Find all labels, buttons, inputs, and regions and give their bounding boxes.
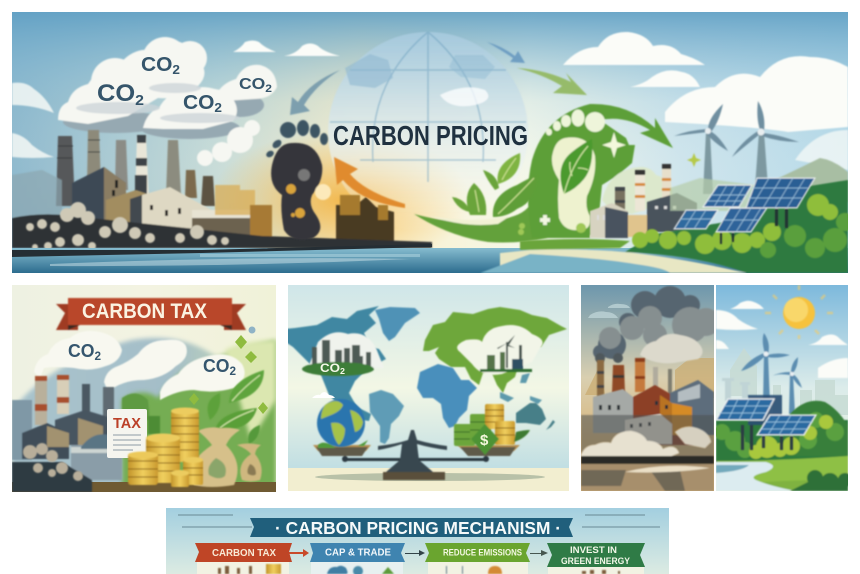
CO2 labels in clouds: 2 <box>214 100 222 115</box>
mechanism background <box>166 508 669 574</box>
earth globe on scale <box>317 399 368 448</box>
title: carbon pricing: CARBON PRICING <box>333 120 528 151</box>
CO2 label on city: CO <box>320 361 338 375</box>
solar panels <box>716 395 816 450</box>
water strip <box>12 244 848 273</box>
carbon tax red banner <box>56 298 246 330</box>
CO2 labels in clouds: CO <box>141 54 171 76</box>
background clouds <box>12 32 848 170</box>
tax document: TAX <box>113 415 141 432</box>
trees and grass <box>714 401 852 491</box>
clean sky <box>716 285 848 491</box>
chimneys <box>56 130 215 206</box>
dollar sign: $ <box>480 432 489 449</box>
step: carbon tax: CARBON TAX <box>212 548 276 559</box>
green sweep and clean footprint <box>414 104 701 242</box>
CO2 label on city: 2 <box>340 367 346 376</box>
CO2 labels in clouds <box>98 57 272 112</box>
balance scale <box>313 430 520 480</box>
step: reduce emissions <box>425 543 530 562</box>
CO2 labels: CO <box>203 356 230 376</box>
polluted ground and water <box>581 415 714 491</box>
polluted factories <box>593 380 714 445</box>
low ground smoke <box>26 202 229 250</box>
clean chimneys <box>722 378 750 402</box>
carbon footprint icon, dark <box>265 120 331 240</box>
polluted chimneys <box>597 358 672 399</box>
CO2 labels in clouds: CO <box>97 80 133 107</box>
CO2 labels in clouds: CO <box>239 76 263 93</box>
money bags <box>191 427 262 487</box>
polluted sky <box>581 285 715 491</box>
decorative diamonds <box>189 326 268 414</box>
panel: polluted versus clean comparison <box>581 285 852 491</box>
city with CO2 emissions <box>302 332 384 376</box>
step: cap and trade: CAP & TRADE <box>325 548 391 558</box>
left clouds of CO2 smoke <box>58 37 277 166</box>
arrow: tax to cap and trade <box>289 549 309 557</box>
mechanism step icons, cropped <box>218 564 620 574</box>
CO2 labels <box>68 341 236 378</box>
leaves <box>452 153 537 217</box>
polluted city side <box>581 285 720 491</box>
panel: hero carbon pricing scene <box>12 12 854 273</box>
tax document <box>107 409 147 458</box>
step: invest in green energy <box>547 543 645 567</box>
step: cap and trade <box>310 543 405 562</box>
panel: carbon tax <box>12 285 276 492</box>
CO2 labels in clouds: 2 <box>265 83 272 95</box>
coin stacks and dollar diamond <box>454 404 530 455</box>
panel: carbon pricing mechanism <box>166 508 669 574</box>
step: carbon tax <box>195 543 292 562</box>
carbon tax background <box>12 285 276 492</box>
panel: global carbon market scale <box>263 285 569 491</box>
hero sky background <box>12 12 848 273</box>
clean factory <box>590 164 697 238</box>
CO2 labels in clouds: 2 <box>135 92 144 109</box>
factory buildings, polluted side <box>12 167 432 248</box>
CO2 labels: 2 <box>94 349 101 363</box>
CO2 labels: 2 <box>229 364 236 378</box>
arrow: reduce to invest <box>530 550 548 556</box>
arrow: trade to reduce <box>405 550 425 556</box>
step: reduce emissions: REDUCE EMISSIONS <box>443 548 522 558</box>
CO2 labels: CO <box>68 341 95 361</box>
ground smoke <box>23 443 83 481</box>
carbon tax banner text: CARBON TAX <box>82 300 207 323</box>
wind turbines <box>741 333 802 414</box>
mechanism heading banner: · CARBON PRICING MECHANISM · <box>275 518 561 538</box>
world map continents <box>263 306 567 444</box>
step: invest in green energy: GREEN ENERGY <box>561 556 631 567</box>
arrows around globe <box>290 42 587 208</box>
distant hills <box>670 158 848 211</box>
step: invest in green energy: INVEST IN <box>570 545 617 556</box>
solar panels <box>674 178 815 244</box>
sun <box>765 285 833 339</box>
map background <box>288 285 569 491</box>
wind turbines <box>674 101 799 194</box>
globe with grid lines <box>328 32 528 232</box>
gold coin stacks <box>128 408 203 487</box>
CO2 labels in clouds: CO <box>183 92 213 114</box>
leaves <box>208 370 264 444</box>
carbon tax factory <box>12 375 160 492</box>
CO2 labels in clouds: 2 <box>172 62 180 77</box>
clean city side <box>714 285 852 491</box>
green energy scene on map <box>457 325 543 375</box>
small cloud <box>312 392 335 398</box>
smoke clouds <box>34 331 245 400</box>
dark smoke <box>593 286 720 363</box>
green forest <box>480 180 854 273</box>
